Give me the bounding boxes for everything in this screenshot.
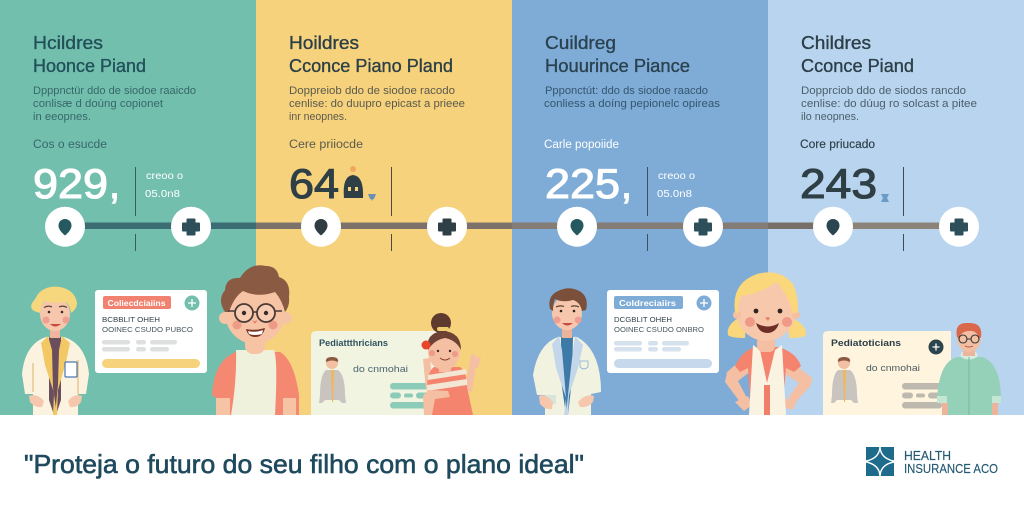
footer band	[0, 415, 1024, 512]
logo text: HEALTH	[904, 449, 951, 463]
illustration: boy with glasses	[212, 265, 299, 415]
logo text: INSURANCE ACO	[904, 462, 998, 476]
side note: blue plan	[657, 171, 695, 200]
text block: blue plan description: Ppponctút: ddo ds siodoe raacdo	[545, 85, 708, 97]
number: 64	[289, 160, 376, 207]
text block: light blue plan description: Dopprciob ddo de siodos rancdo	[801, 85, 966, 97]
side note: green plan	[145, 171, 183, 200]
number: 929: ,	[109, 160, 120, 207]
text block: green plan description: conlisæ d doúng copionet	[33, 98, 163, 110]
heading: green plan: Hoonce Piand	[33, 56, 146, 76]
text block: green plan description: in eeopnes.	[33, 111, 91, 123]
icon: mini doctor	[831, 357, 858, 403]
text block: green plan description	[33, 85, 196, 123]
heading: green plan	[33, 33, 146, 76]
heading: yellow plan: Cconce Piano Pland	[289, 56, 453, 76]
marker: plus 1	[171, 207, 211, 247]
heading: blue plan: Houurince Piance	[545, 56, 690, 76]
text block: yellow plan description	[289, 85, 465, 123]
icon: dark plus	[928, 340, 944, 354]
text block: green plan description: Dpppnctür ddo de siodoe raaicdo	[33, 85, 196, 97]
text: card note: do cnmohai	[866, 363, 920, 374]
text block: blue card lines	[614, 315, 704, 334]
text: card note: do cnmohai	[353, 364, 408, 375]
text block: yellow plan description: Doppreiob ddo de siodoe racodo	[289, 85, 455, 97]
label: green plan price: Cos o esucde	[33, 139, 107, 151]
heading: blue plan: Cuildreg	[545, 33, 616, 53]
panel: blue plan	[512, 0, 768, 415]
number: 64: 64	[289, 160, 339, 207]
card: blue plan details	[607, 290, 719, 373]
badge: blue label: Coldreciaiirs	[619, 299, 677, 308]
text: card heading: Pediattthricians	[319, 338, 388, 348]
text block: card lines: OOINEC CSUDO PUBCO	[102, 325, 193, 334]
icon: blue plus	[696, 296, 712, 310]
text block: light blue plan description: ilo neopnes.	[801, 111, 859, 123]
text block: card lines: BCBBLIT OHEH	[102, 315, 160, 324]
number: 929: 929	[33, 160, 108, 207]
illustration: blonde girl	[725, 272, 812, 415]
logo mark	[864, 446, 896, 477]
marker: plus 2	[427, 207, 467, 247]
text block: yellow plan description: inr neopnes.	[289, 111, 347, 123]
text: card heading: Pediatoticians	[831, 338, 901, 348]
marker: plus 3	[683, 207, 723, 247]
heading: light blue plan: Cconce Piand	[801, 56, 914, 76]
card: green plan details	[95, 290, 207, 373]
number: 64: A	[343, 173, 363, 205]
card: pediatricians light blue panel	[823, 331, 951, 415]
side note: green plan: creoo o	[146, 171, 183, 182]
icon: green plus	[184, 296, 200, 310]
icon: mini doctor	[319, 357, 346, 403]
marker: pin 3	[557, 207, 597, 247]
heading: light blue plan	[801, 33, 914, 76]
illustration: doctor with red hair	[937, 323, 1001, 415]
heading: light blue plan: Childres	[801, 33, 871, 53]
side note: blue plan: 05.0n8	[657, 189, 692, 200]
number: 225: ,	[621, 160, 632, 207]
heading: yellow plan	[289, 33, 453, 76]
heading: yellow plan: Hoildres	[289, 33, 359, 53]
label: yellow plan price: Cere priiocde	[289, 139, 363, 151]
panel: green plan	[0, 0, 256, 415]
side note: blue plan: creoo o	[658, 171, 695, 182]
slogan: "Proteja o futuro do seu filho com o plano ideal"	[24, 449, 584, 479]
panel: light blue plan	[768, 0, 1024, 415]
marker: pin 4	[813, 207, 853, 247]
text block: card lines	[102, 315, 193, 334]
badge: coral label: Coliecdciaiins	[108, 299, 166, 308]
illustration: brown-haired doctor	[533, 288, 601, 415]
marker: pin 2	[301, 207, 341, 247]
text block: yellow plan description: cenlise: do duupro epicast a prieee	[289, 98, 465, 110]
illustration: blond doctor	[22, 287, 89, 415]
heading: green plan: Hcildres	[33, 33, 103, 53]
card: pediatricians yellow panel	[311, 331, 440, 415]
heading: blue plan	[545, 33, 690, 76]
logo text	[904, 449, 998, 476]
illustration: waving girl	[422, 313, 481, 415]
text block: light blue plan description: cenlise: do dúug ro solcast a pitee	[801, 98, 977, 110]
marker: pin 1	[45, 207, 85, 247]
text block: light blue plan description	[801, 85, 977, 123]
number: 225: 225	[545, 160, 620, 207]
text block: blue plan description: conliess a doíng pepionelc opireas	[544, 98, 721, 110]
text block: blue plan description	[544, 85, 721, 110]
number: 243: 243	[800, 160, 877, 207]
timeline	[45, 167, 979, 251]
text block: blue card lines: OOINEC CSUDO ONBRO	[614, 325, 704, 334]
panel: yellow plan	[256, 0, 512, 415]
label: light blue plan price: Core priucado	[800, 139, 875, 151]
text block: blue card lines: DCGBLIT OHEH	[614, 315, 672, 324]
marker: plus 4	[939, 207, 979, 247]
side note: green plan: 05.0n8	[145, 189, 180, 200]
label: blue plan price: Carle popoiide	[544, 139, 619, 151]
